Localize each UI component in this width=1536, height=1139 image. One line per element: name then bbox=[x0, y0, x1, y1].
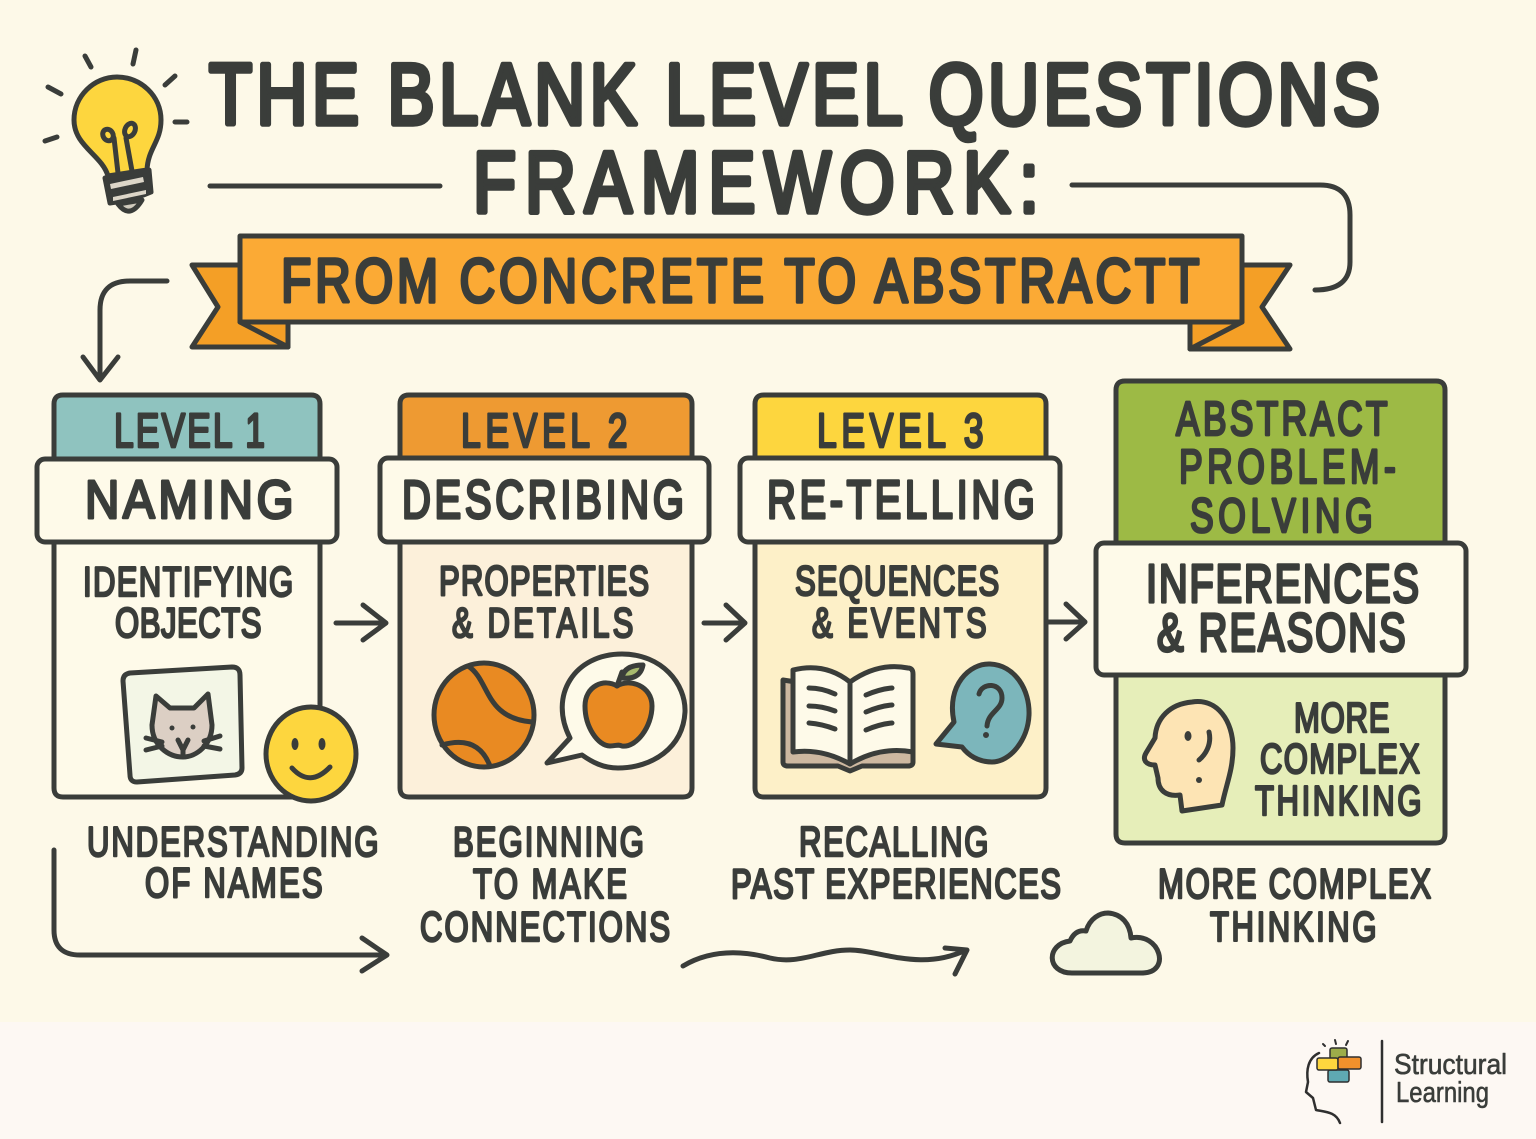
icon: cat picture card bbox=[123, 667, 242, 782]
icon: cloud bbox=[1052, 913, 1159, 973]
icon: speech bubble with apple bbox=[547, 654, 685, 768]
panel: level 2 describing: PROPERTIES bbox=[439, 557, 649, 604]
icon: smiley bbox=[266, 707, 356, 801]
title: FRAMEWORK: bbox=[473, 134, 1039, 231]
panel: level 3 re-telling: & EVENTS bbox=[812, 599, 987, 646]
banner bbox=[192, 236, 1290, 349]
arrow: squiggle bbox=[683, 948, 967, 974]
caption: abstract level: MORE COMPLEX bbox=[1158, 860, 1431, 907]
panel: abstract problem-solving: THINKING bbox=[1255, 777, 1422, 824]
panel: level 3 re-telling bbox=[740, 395, 1060, 797]
icon: head with question mark bbox=[1144, 702, 1233, 811]
caption: abstract level bbox=[1158, 860, 1431, 950]
panel: abstract problem-solving: MORE bbox=[1294, 694, 1389, 741]
panel: level 2 describing: DESCRIBING bbox=[402, 470, 684, 531]
banner: FROM CONCRETE TO ABSTRACTT bbox=[281, 246, 1199, 315]
icon: lightbulb bbox=[45, 50, 187, 211]
icon: ball bbox=[434, 663, 534, 767]
panel: abstract problem-solving: & REASONS bbox=[1157, 603, 1406, 664]
panel: level 1 naming: OBJECTS bbox=[115, 599, 262, 646]
panel: level 3 re-telling: RE-TELLING bbox=[767, 470, 1035, 531]
caption: abstract level: THINKING bbox=[1210, 903, 1377, 950]
connector: title to banner right bbox=[1072, 185, 1350, 290]
panel: level 1 naming: NAMING bbox=[85, 469, 294, 530]
arrow: bottom left curved bbox=[54, 850, 387, 971]
caption: level 3: RECALLING bbox=[799, 818, 988, 865]
caption: level 2: TO MAKE bbox=[473, 860, 627, 907]
panel: level 2 describing: & DETAILS bbox=[452, 599, 633, 646]
arrow: banner to level 1 bbox=[83, 281, 167, 380]
panel: level 2 describing bbox=[380, 395, 709, 797]
logo: structural learning: Learning bbox=[1396, 1077, 1489, 1109]
panel: abstract problem-solving bbox=[1096, 381, 1466, 843]
icon: question bubble bbox=[936, 664, 1029, 762]
caption: level 1: UNDERSTANDING bbox=[87, 818, 379, 865]
arrow: level 1 to level 2 bbox=[336, 605, 386, 640]
caption: level 2 bbox=[420, 818, 670, 950]
panel: level 2 describing: LEVEL 2 bbox=[461, 404, 628, 457]
panel: level 3 re-telling: SEQUENCES bbox=[795, 557, 999, 604]
panel: level 1 naming: IDENTIFYING bbox=[83, 558, 293, 605]
caption: level 1: OF NAMES bbox=[145, 859, 323, 906]
title bbox=[209, 46, 1380, 231]
panel: abstract problem-solving: ABSTRACT bbox=[1176, 392, 1388, 445]
caption: level 3 bbox=[731, 818, 1061, 907]
panel: abstract problem-solving: SOLVING bbox=[1190, 489, 1373, 542]
caption: level 1 bbox=[87, 818, 379, 906]
panel: abstract problem-solving: COMPLEX bbox=[1260, 735, 1420, 782]
caption: level 3: PAST EXPERIENCES bbox=[731, 860, 1061, 907]
panel: level 1 naming: LEVEL 1 bbox=[114, 404, 265, 457]
panel: level 1 naming bbox=[37, 395, 356, 801]
caption: level 2: BEGINNING bbox=[453, 818, 644, 865]
title: THE BLANK LEVEL QUESTIONS bbox=[209, 46, 1380, 143]
panel: abstract problem-solving: PROBLEM- bbox=[1179, 440, 1396, 493]
logo: structural learning: Structural bbox=[1394, 1049, 1507, 1081]
icon: open book bbox=[783, 667, 913, 771]
panel: abstract problem-solving: INFERENCES bbox=[1146, 554, 1419, 615]
panel: level 3 re-telling: LEVEL 3 bbox=[817, 404, 984, 457]
caption: level 2: CONNECTIONS bbox=[420, 903, 670, 950]
logo: structural learning bbox=[1306, 1040, 1507, 1123]
arrow: level 2 to level 3 bbox=[704, 605, 745, 640]
arrow: level 3 to abstract bbox=[1048, 604, 1085, 639]
